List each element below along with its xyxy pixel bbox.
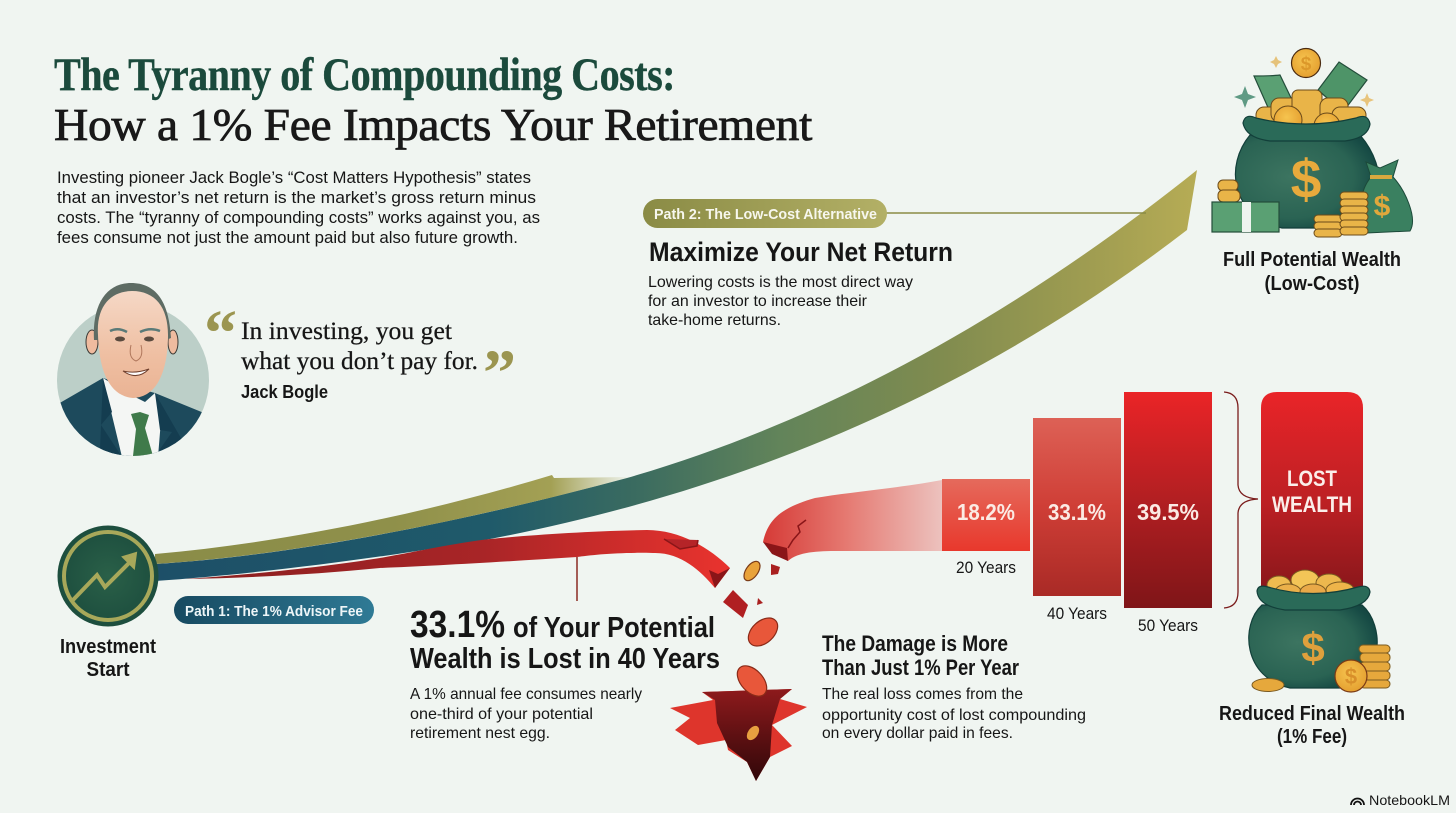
panel: lost wealth <box>1261 392 1363 590</box>
icon: Jack Bogle portrait <box>57 283 209 470</box>
title <box>54 49 813 150</box>
text block: lowering costs: for an investor to increase their <box>648 293 868 310</box>
chart: red fee path curve <box>185 530 730 588</box>
label: investment start <box>60 636 156 681</box>
callout: path 1 pill <box>174 596 374 624</box>
icon: cracked edge <box>763 520 806 561</box>
text block: intro: costs. The “tyranny of compounding costs” works against you, as <box>57 209 540 227</box>
icon: full wealth pot: $ <box>1301 54 1312 75</box>
connector line: path 1 <box>576 557 578 601</box>
label: investment start: Start <box>86 659 130 681</box>
bar: 20 years: 18.2% <box>957 499 1015 525</box>
bar: 50 years <box>1124 392 1212 635</box>
quote: what you don’t pay for. <box>241 348 478 375</box>
icon: investment start <box>58 526 158 626</box>
text block: intro: Investing pioneer Jack Bogle’s “Cost Matters Hypothesis” states <box>57 169 531 187</box>
label: investment start: Investment <box>60 636 156 658</box>
heading: damage: Than Just 1% Per Year <box>822 655 1019 680</box>
label: reduced final wealth <box>1219 703 1405 748</box>
bar: 40 years <box>1033 418 1121 623</box>
title: How a 1% Fee Impacts Your Retirement <box>54 99 813 150</box>
bar: 40 years: 33.1% <box>1048 499 1106 525</box>
heading: damage <box>822 631 1019 680</box>
bar: 50 years: 50 Years <box>1138 617 1198 635</box>
icon: reduced wealth pot: $ <box>1301 624 1325 671</box>
callout: path 2 pill <box>643 199 1146 228</box>
heading: 33.1 percent lost: 33.1% <box>410 604 505 646</box>
icon: broken end of red curve <box>664 539 730 588</box>
icon: opening quote mark: “ <box>204 297 237 370</box>
heading: maximize net return: Maximize Your Net Return <box>649 237 953 267</box>
text block: opportunity cost <box>822 686 1086 742</box>
text block: lowering costs: Lowering costs is the most direct way <box>648 274 913 291</box>
label: reduced final wealth: (1% Fee) <box>1277 726 1347 748</box>
bar: 20 years: 20 Years <box>956 559 1016 577</box>
text block: opportunity cost: The real loss comes from the <box>822 686 1023 703</box>
bar: 40 years: 40 Years <box>1047 605 1107 623</box>
chart: low-cost path curve <box>155 170 1197 581</box>
heading: 33.1 percent lost <box>410 604 720 675</box>
label: reduced final wealth: Reduced Final Wealth <box>1219 703 1405 725</box>
icon: full wealth pot <box>1212 48 1412 237</box>
callout: path 2 pill: Path 2: The Low-Cost Alternative <box>654 206 877 223</box>
quote <box>204 297 516 410</box>
bracket <box>1224 392 1258 608</box>
label: full potential wealth: (Low-Cost) <box>1264 273 1360 295</box>
icon: full wealth pot: $ <box>1374 190 1391 223</box>
chart: olive overlay band <box>155 475 630 564</box>
text block: lowering costs <box>648 274 913 329</box>
text block: intro: that an investor’s net return is the market’s gross return minus <box>57 189 536 207</box>
icon: falling coins and debris <box>723 559 783 702</box>
icon: crack in ground <box>670 689 807 781</box>
text block: opportunity cost: on every dollar paid in fees. <box>822 725 1013 742</box>
logo: NotebookLM: NotebookLM <box>1369 792 1450 808</box>
text block: opportunity cost: opportunity cost of lost compounding <box>822 707 1086 724</box>
panel: lost wealth: WEALTH <box>1272 492 1352 517</box>
text block: intro: fees consume not just the amount paid but also future growth. <box>57 229 518 247</box>
label: full potential wealth: Full Potential Wealth <box>1223 249 1401 271</box>
callout: path 1 pill: Path 1: The 1% Advisor Fee <box>185 603 363 620</box>
text block: one-third <box>410 686 642 742</box>
title: The Tyranny of Compounding Costs: <box>54 49 675 101</box>
heading: damage: The Damage is More <box>822 631 1008 656</box>
text block: intro <box>57 169 540 247</box>
bar: 50 years: 39.5% <box>1137 499 1199 525</box>
panel: lost wealth: LOST <box>1287 466 1337 491</box>
text block: one-third: one-third of your potential <box>410 706 593 723</box>
icon: reduced wealth pot <box>1249 570 1390 692</box>
quote: In investing, you get <box>241 318 452 345</box>
icon: reduced wealth pot: $ <box>1345 664 1357 689</box>
quote: Jack Bogle <box>241 382 328 402</box>
heading: 33.1 percent lost: Wealth is Lost in 40 Years <box>410 643 720 675</box>
quote: ” <box>483 337 516 410</box>
chart: fading red curve to bars <box>763 480 942 561</box>
heading: 33.1 percent lost: of Your Potential <box>513 612 715 644</box>
icon: full wealth pot: $ <box>1291 148 1321 210</box>
text block: one-third: retirement nest egg. <box>410 725 550 742</box>
text block: lowering costs: take-home returns. <box>648 312 781 329</box>
label: full potential wealth <box>1223 249 1401 295</box>
bar: 20 years <box>942 479 1030 577</box>
text block: one-third: A 1% annual fee consumes nearly <box>410 686 642 703</box>
